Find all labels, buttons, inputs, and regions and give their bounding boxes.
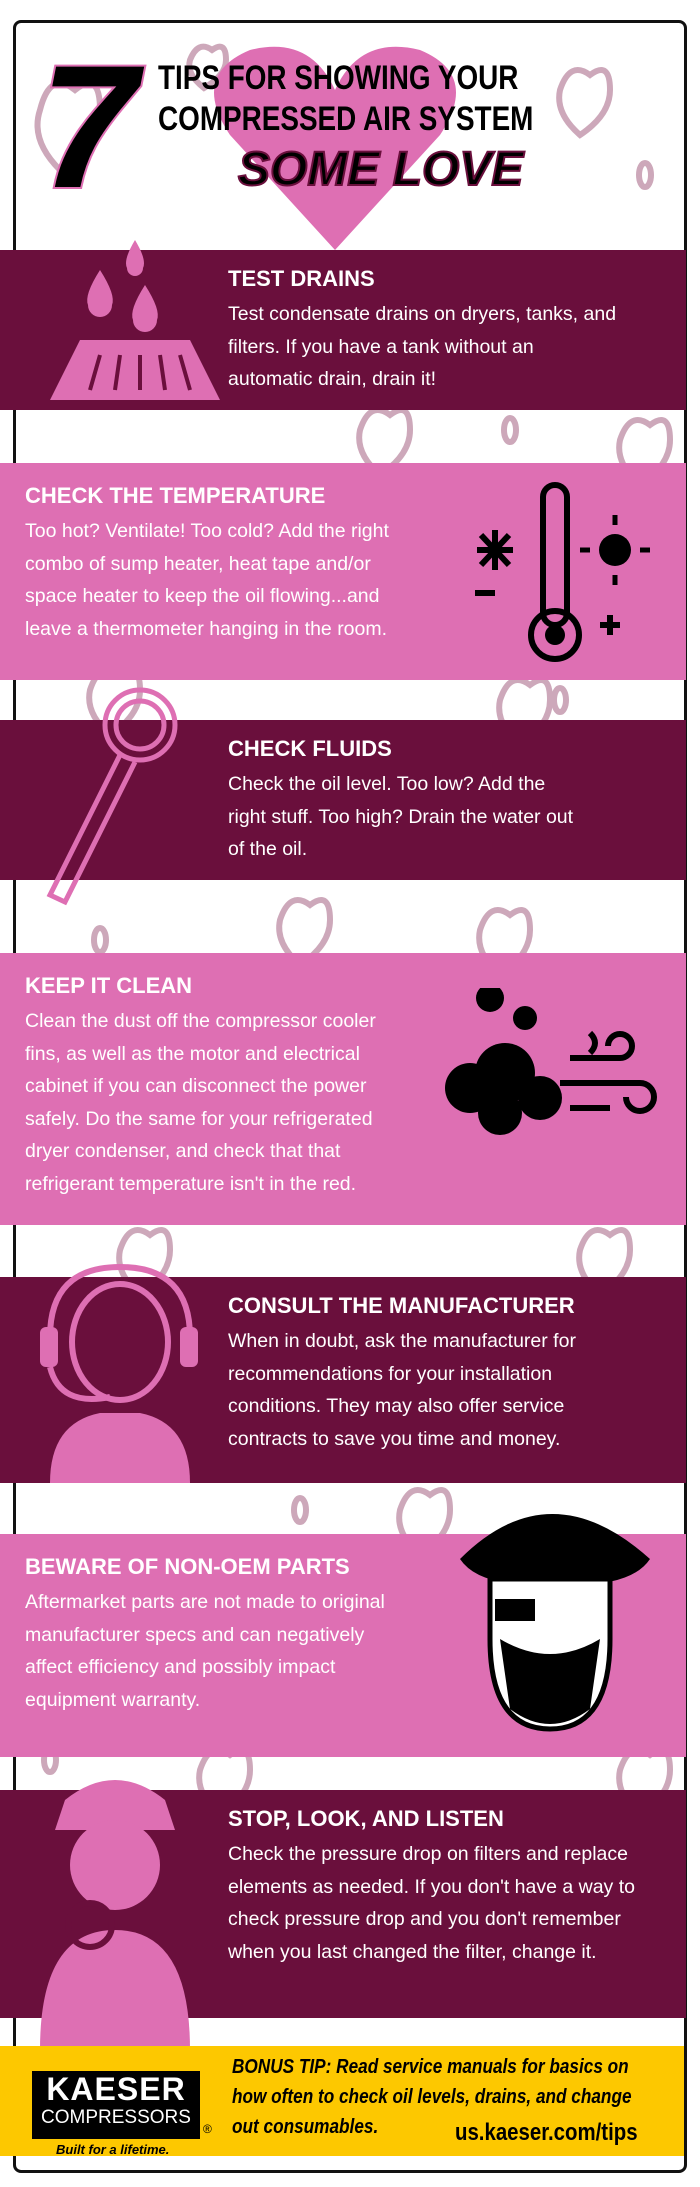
panel: consult manufacturer: recommendations for your installation	[228, 1362, 552, 1384]
panel: keep it clean: fins, as well as the motor and electrical	[25, 1042, 360, 1064]
bonus tip: out consumables.	[232, 2116, 378, 2138]
panel: consult manufacturer: contracts to save you time and money.	[228, 1428, 560, 1450]
panel: consult manufacturer: conditions. They may also offer service	[228, 1395, 564, 1417]
panel: check temperature	[0, 463, 686, 680]
panel: non-oem parts: Aftermarket parts are not made to original	[25, 1591, 385, 1613]
panel: check fluids	[0, 720, 686, 880]
icon: pirate	[460, 1514, 650, 1732]
panel: test drains	[0, 250, 686, 410]
panel: non-oem parts: BEWARE OF NON-OEM PARTS	[25, 1554, 350, 1579]
panel: keep it clean	[0, 953, 686, 1225]
panel: check fluids: of the oil.	[228, 838, 307, 860]
panel: stop look listen: STOP, LOOK, AND LISTEN	[228, 1806, 504, 1831]
text: automatic drain, drain it!	[228, 368, 436, 390]
text	[228, 266, 616, 390]
logo	[32, 2071, 200, 2139]
text: filters. If you have a tank without an	[228, 336, 534, 358]
text: TEST DRAINS	[228, 266, 375, 291]
header	[40, 30, 533, 250]
panel: non-oem parts: affect efficiency and possibly impact	[25, 1656, 335, 1678]
panel: check temperature: combo of sump heater, heat tape and/or	[25, 552, 371, 574]
number 7: 7	[40, 30, 137, 225]
icon: thermometer	[475, 482, 650, 662]
panel: consult manufacturer	[0, 1277, 686, 1483]
panel: keep it clean: Clean the dust off the compressor cooler	[25, 1010, 376, 1032]
panel: stop look listen: elements as needed. If you don't have a way to	[228, 1876, 635, 1898]
logo: KAESER	[46, 2071, 186, 2107]
icon: drains	[50, 240, 220, 400]
icon: dust	[445, 988, 657, 1135]
panel: stop look listen: check pressure drop and you don't remember	[228, 1908, 621, 1930]
panel: keep it clean: dryer condenser, and check that that	[25, 1140, 340, 1162]
panel: non-oem parts: manufacturer specs and can negatively	[25, 1624, 364, 1646]
footer: Built for a lifetime.	[56, 2142, 169, 2157]
big heart	[214, 46, 456, 250]
title: TIPS FOR SHOWING YOUR	[158, 59, 518, 97]
panel: check temperature: space heater to keep the oil flowing...and	[25, 585, 380, 607]
panel: check temperature: Too hot? Ventilate! Too cold? Add the right	[25, 520, 389, 542]
panel: consult manufacturer: When in doubt, ask the manufacturer for	[228, 1330, 576, 1352]
title: COMPRESSED AIR SYSTEM	[158, 100, 533, 138]
subtitle: SOME LOVE	[238, 143, 523, 196]
bonus tip: BONUS TIP: Read service manuals for basics on	[232, 2056, 629, 2078]
panel: check temperature: leave a thermometer hanging in the room.	[25, 618, 387, 640]
logo: COMPRESSORS	[41, 2107, 191, 2128]
url: us.kaeser.com/tips	[455, 2119, 638, 2146]
text: Test condensate drains on dryers, tanks, and	[228, 303, 616, 325]
panel: check fluids: CHECK FLUIDS	[228, 736, 392, 761]
panel: check fluids: right stuff. Too high? Drain the water out	[228, 806, 573, 828]
panel: keep it clean: KEEP IT CLEAN	[25, 973, 192, 998]
panel: check temperature: CHECK THE TEMPERATURE	[25, 483, 325, 508]
panel: keep it clean: cabinet if you can disconnect the power	[25, 1075, 366, 1097]
panel: stop look listen: when you last changed the filter, change it.	[228, 1940, 597, 1962]
bonus tip: how often to check oil levels, drains, and change	[232, 2086, 632, 2108]
panel: non-oem parts	[0, 1534, 686, 1757]
panel: keep it clean: safely. Do the same for your refrigerated	[25, 1108, 373, 1130]
panel: stop look listen	[0, 1790, 686, 2018]
icon: detective	[40, 1780, 190, 2046]
panel: non-oem parts: equipment warranty.	[25, 1688, 200, 1710]
panel: consult manufacturer: CONSULT THE MANUFACTURER	[228, 1293, 575, 1318]
footer	[0, 2046, 684, 2156]
icon: headset person	[40, 1264, 198, 1483]
panel: check fluids: Check the oil level. Too low? Add the	[228, 773, 545, 795]
footer: ®	[203, 2122, 212, 2136]
bonus tip	[232, 2056, 632, 2138]
icon: dipstick	[46, 688, 178, 906]
panel: keep it clean: refrigerant temperature isn't in the red.	[25, 1172, 356, 1194]
panel: stop look listen: Check the pressure drop on filters and replace	[228, 1843, 628, 1865]
title	[158, 59, 533, 138]
